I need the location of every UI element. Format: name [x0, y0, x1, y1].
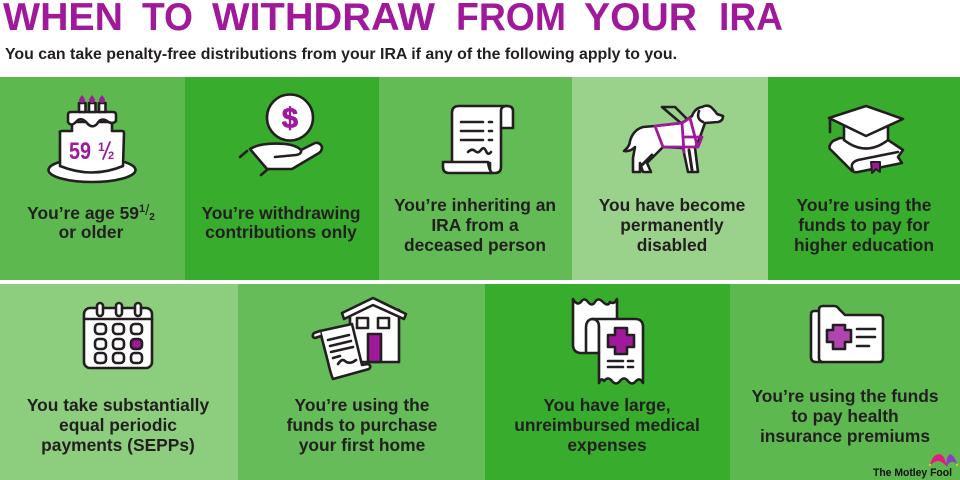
- icon: medical folder: [811, 306, 883, 362]
- label: expenses: [567, 435, 647, 455]
- logo: The Motley Fool: [873, 454, 958, 479]
- icon: medical bills: [573, 299, 643, 384]
- panel: age 59 1/2: [0, 77, 185, 280]
- label: payments (SEPPs): [41, 435, 195, 455]
- subtitle: You can take penalty-free distributions from your IRA if any of the following apply to you.: [5, 46, 677, 63]
- label: higher education: [794, 235, 934, 255]
- label: unreimbursed medical: [514, 415, 700, 435]
- icon: birthday cake: 59: [69, 138, 91, 165]
- label: permanently: [620, 215, 724, 235]
- label: your first home: [299, 435, 426, 455]
- label: /: [145, 202, 150, 219]
- label: equal periodic: [59, 415, 177, 435]
- label: to pay health: [791, 406, 899, 426]
- panel: higher education: [768, 77, 960, 280]
- label: You have large,: [543, 395, 671, 415]
- label: deceased person: [404, 235, 546, 255]
- icon: calendar: [84, 303, 152, 368]
- label: contributions only: [205, 222, 357, 242]
- label: 2: [149, 212, 155, 223]
- icon: hand holding coin: [240, 94, 322, 175]
- panel: first home: [238, 284, 485, 480]
- label: funds to purchase: [287, 415, 438, 435]
- logo: The Motley Fool: The Motley Fool: [873, 467, 952, 479]
- panel: SEPPs: [0, 284, 238, 480]
- icon: hand holding coin: $: [282, 103, 298, 135]
- icon: birthday cake: [48, 95, 136, 182]
- label: You’re using the funds: [751, 386, 939, 406]
- label: IRA from a: [431, 215, 519, 235]
- label: disabled: [637, 235, 707, 255]
- panel: medical expenses: [485, 284, 730, 480]
- title: [3, 0, 783, 39]
- icon: birthday cake: 1: [98, 140, 105, 154]
- icon: graduation cap on book: [829, 106, 903, 173]
- label: insurance premiums: [760, 426, 930, 446]
- icon: guide dog with harness: [624, 106, 723, 172]
- label: You have become: [599, 195, 746, 215]
- icon: scroll document: [443, 106, 513, 173]
- icon: birthday cake: 2: [108, 150, 114, 162]
- icon: house and deed: [313, 298, 406, 379]
- panel: inheriting an IRA: [379, 77, 572, 280]
- label: You’re age 59: [27, 202, 155, 223]
- label: You’re withdrawing: [201, 203, 361, 223]
- panel: health insurance premiums: [730, 284, 960, 480]
- label: You’re using the: [295, 395, 430, 415]
- panel: withdrawing contributions: [185, 77, 379, 280]
- label: 1: [139, 203, 145, 215]
- label: funds to pay for: [798, 215, 930, 235]
- label: You’re using the: [797, 195, 932, 215]
- label: You’re inheriting an: [394, 195, 556, 215]
- label: or older: [59, 222, 124, 242]
- label: You take substantially: [27, 395, 209, 415]
- panel: permanently disabled: [572, 77, 768, 280]
